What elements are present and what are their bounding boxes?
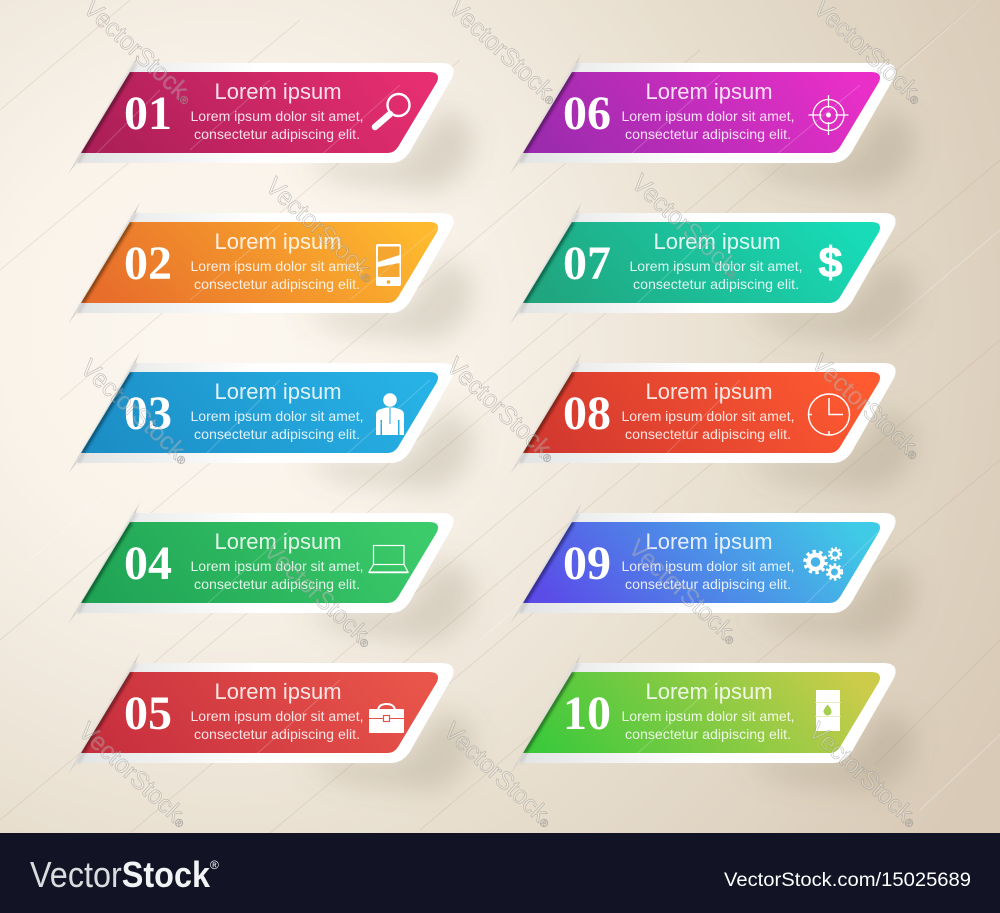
watermarks: VectorStock® xyxy=(806,349,927,465)
card 09: Lorem ipsum xyxy=(646,529,772,554)
watermarks: VectorStock® xyxy=(75,354,196,470)
icon: clock xyxy=(808,394,850,435)
icon: magnifier xyxy=(375,94,410,127)
card 04 xyxy=(68,502,474,642)
card 03: Lorem ipsum xyxy=(214,379,342,404)
card 01: 01 xyxy=(124,87,172,140)
footer url: VectorStock.com/15025689 xyxy=(724,870,971,891)
watermarks: VectorStock® xyxy=(260,172,381,288)
card 08: Lorem ipsum dolor sit amet, xyxy=(622,408,794,424)
card 09: 09 xyxy=(563,537,611,590)
watermarks: VectorStock® xyxy=(73,717,194,833)
card 01 xyxy=(68,52,474,192)
card 08: consectetur adipiscing elit. xyxy=(625,426,791,442)
card 02: Lorem ipsum xyxy=(214,229,342,254)
card 02: consectetur adipiscing elit. xyxy=(194,276,360,292)
card 05 xyxy=(68,652,474,792)
diagonal sheen lines xyxy=(90,75,880,760)
icon: gears xyxy=(805,548,842,580)
icon: briefcase xyxy=(369,704,404,733)
watermarks: VectorStock® xyxy=(623,534,744,650)
card 02 xyxy=(68,202,474,342)
card 10: Lorem ipsum xyxy=(646,679,772,704)
card 03: consectetur adipiscing elit. xyxy=(194,426,360,442)
footer logo: VectorStock xyxy=(30,854,211,895)
card 03: 03 xyxy=(124,387,172,440)
card 07: consectetur adipiscing elit. xyxy=(633,276,799,292)
card 05: Lorem ipsum xyxy=(214,679,342,704)
card 08: Lorem ipsum xyxy=(646,379,772,404)
watermarks xyxy=(73,0,929,833)
icon: businessman xyxy=(376,393,404,435)
card 08: 08 xyxy=(563,387,611,440)
card 10: Lorem ipsum dolor sit amet, xyxy=(622,708,794,724)
card 06 xyxy=(510,52,916,192)
card 07: Lorem ipsum xyxy=(654,229,780,254)
card 09: consectetur adipiscing elit. xyxy=(625,576,791,592)
card 04: Lorem ipsum dolor sit amet, xyxy=(190,558,364,574)
watermarks: VectorStock® xyxy=(258,537,379,653)
watermarks: VectorStock® xyxy=(803,717,924,833)
watermarks: VectorStock® xyxy=(626,169,747,285)
card 05: Lorem ipsum dolor sit amet, xyxy=(190,708,364,724)
card 09 xyxy=(510,502,916,642)
icon: dollar: $ xyxy=(819,239,843,287)
card 05: 05 xyxy=(124,687,172,740)
card 01: Lorem ipsum xyxy=(214,79,342,104)
card 02: Lorem ipsum dolor sit amet, xyxy=(190,258,364,274)
icon: laptop xyxy=(369,546,408,572)
card 06: Lorem ipsum dolor sit amet, xyxy=(622,108,794,124)
card 06: consectetur adipiscing elit. xyxy=(625,126,791,142)
card 06: Lorem ipsum xyxy=(646,79,772,104)
card 04: Lorem ipsum xyxy=(214,529,342,554)
card 10 xyxy=(510,652,916,792)
footer bar xyxy=(0,833,1000,913)
card 07 xyxy=(510,202,916,342)
card 07: 07 xyxy=(563,237,611,290)
card 03: Lorem ipsum dolor sit amet, xyxy=(190,408,364,424)
card 03 xyxy=(68,352,474,492)
card 09: Lorem ipsum dolor sit amet, xyxy=(622,558,794,574)
icon: oil barrel xyxy=(815,690,841,731)
icon: smartphone xyxy=(376,244,401,286)
card 02: 02 xyxy=(124,237,172,290)
card 08 xyxy=(510,352,916,492)
card 10: 10 xyxy=(563,687,611,740)
footer registered mark: ® xyxy=(210,858,219,872)
card 04: consectetur adipiscing elit. xyxy=(194,576,360,592)
watermarks: VectorStock® xyxy=(438,717,559,833)
card 10: consectetur adipiscing elit. xyxy=(625,726,791,742)
card 05: consectetur adipiscing elit. xyxy=(194,726,360,742)
card 07: Lorem ipsum dolor sit amet, xyxy=(630,258,802,274)
watermarks: VectorStock® xyxy=(441,352,562,468)
icon: target xyxy=(808,95,848,135)
card 01: consectetur adipiscing elit. xyxy=(194,126,360,142)
card 04: 04 xyxy=(124,537,172,590)
card 01: Lorem ipsum dolor sit amet, xyxy=(190,108,364,124)
card 06: 06 xyxy=(563,87,611,140)
